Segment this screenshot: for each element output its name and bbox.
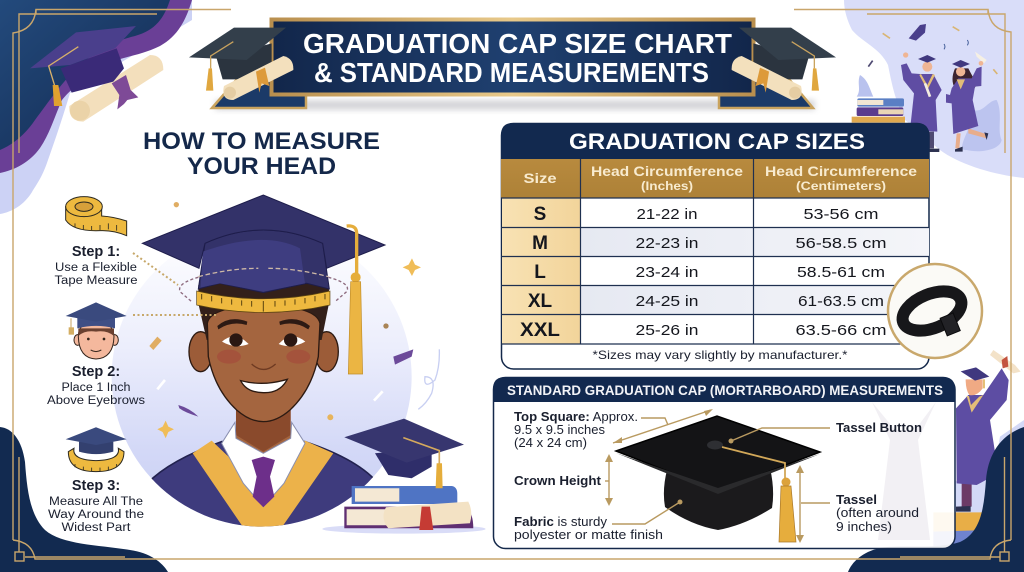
step 3: [48, 427, 144, 534]
icon: celebrating graduates: [852, 24, 1002, 152]
table rows: M: [532, 233, 548, 254]
heading: how to measure: YOUR HEAD: [187, 153, 336, 180]
callout: fabric: Fabric is sturdy: [514, 515, 608, 529]
step 2 text: Place 1 Inch: [62, 382, 130, 394]
gown: [152, 440, 374, 527]
banner plate: [272, 20, 754, 94]
brows: [217, 319, 310, 329]
callout: top square: Top Square: Approx.: [514, 410, 638, 424]
callout: tassel: (often around: [836, 506, 919, 520]
table header row: (Centimeters): [796, 179, 886, 193]
confetti: [149, 202, 439, 438]
banner title: GRADUATION CAP SIZE CHART: [303, 28, 732, 59]
heading: how to measure: [143, 128, 380, 180]
table header row: Head Circumference: [591, 164, 744, 179]
table rows: 63.5-66 cm: [796, 322, 886, 339]
cap crown: [198, 230, 329, 293]
panel header bar: [493, 377, 955, 402]
table rows: 23-24 in: [636, 264, 698, 281]
eyes: [222, 336, 249, 346]
table rows: XL: [528, 291, 553, 312]
callout: top square: 9.5 x 9.5 inches: [514, 423, 605, 437]
table rows: 53-56 cm: [804, 206, 878, 223]
table rows: 24-25 in: [636, 293, 698, 310]
callout: top square: (24 x 24 cm): [514, 436, 587, 450]
icon: small cap and books: [322, 419, 486, 534]
table rows: 56-58.5 cm: [796, 235, 886, 252]
table rows: 21-22 in: [636, 206, 698, 223]
step 1 text: [54, 244, 138, 287]
table rows: L: [534, 262, 546, 283]
table rows: 22-23 in: [636, 235, 698, 252]
measuring tape band: [197, 291, 330, 312]
faded background graduate: [872, 402, 936, 540]
arrow heads and dots: [605, 409, 804, 543]
step 1 text: Step 1:: [72, 244, 120, 260]
step 2 text: [47, 364, 145, 407]
panel title: STANDARD GRADUATION CAP (MORTARBOARD) MEASUREMENTS: [507, 383, 943, 398]
portrait illustration: [112, 195, 439, 533]
callout: fabric: polyester or matte finish: [514, 528, 663, 542]
step 3 text: Step 3:: [72, 478, 120, 494]
step 2: [47, 302, 145, 407]
step 1: [54, 197, 138, 287]
cap board: [142, 195, 385, 268]
tassel: [347, 226, 363, 374]
panel: mortarboard measurements: [493, 377, 955, 548]
lavender circle: [112, 227, 412, 527]
banner title: & STANDARD MEASUREMENTS: [314, 57, 709, 88]
callout: tassel: 9 inches): [836, 520, 892, 534]
table rows: 58.5-61 cm: [797, 264, 885, 281]
step 1 text: Use a Flexible: [55, 262, 137, 274]
step 3 text: Way Around the: [48, 509, 144, 521]
table rows: XXL: [520, 320, 560, 341]
icon: boy with cap: [66, 302, 127, 359]
dashed measure arrows: [180, 268, 348, 302]
icon: banner cap and scroll right: [732, 28, 836, 100]
neck and shirt: [236, 400, 291, 457]
tie: [252, 457, 275, 507]
callout: tassel button: Tassel Button: [836, 421, 922, 435]
heading: how to measure: HOW TO MEASURE: [143, 128, 380, 155]
table rows: S: [534, 204, 546, 225]
icon: tape roll: [66, 197, 127, 236]
callout: top square: [514, 410, 638, 450]
icon: purple cap and scroll top left: [30, 26, 163, 122]
mortarboard cap: [616, 416, 820, 542]
icon: adjustable strap inset: [888, 264, 982, 358]
dotted pointer lines: [133, 253, 218, 315]
step 3 text: Widest Part: [62, 522, 131, 534]
table header row: [501, 159, 929, 198]
step 2 text: Above Eyebrows: [47, 395, 145, 407]
banner: [212, 20, 815, 110]
cheeks: [217, 350, 241, 364]
bottom right graduate: [933, 350, 1024, 550]
smile: [241, 379, 287, 393]
banner title: [303, 28, 732, 88]
callout: tassel: [836, 493, 919, 534]
table footnote: *Sizes may vary slightly by manufacturer.*: [592, 348, 848, 362]
leader lines: [605, 410, 830, 541]
icon: banner cap and scroll left: [189, 28, 293, 100]
hair back: [198, 283, 329, 340]
step 1 text: Tape Measure: [54, 275, 138, 287]
table rows: 61-63.5 cm: [798, 293, 884, 310]
banner left ribbon fold: [212, 78, 306, 108]
bottom-left navy corner: [0, 427, 168, 572]
icon: cap with tape ring: [66, 427, 127, 472]
top-left corner waves: [0, 0, 192, 214]
ears: [189, 332, 212, 372]
face: [207, 305, 320, 422]
table title: GRADUATION CAP SIZES: [569, 129, 865, 154]
callout: fabric: [514, 515, 663, 542]
step 3 text: [48, 478, 144, 534]
table rows: [501, 159, 929, 344]
bottom-right navy corner: [848, 427, 1024, 572]
table rows: 25-26 in: [636, 322, 698, 339]
callout: crown height: Crown Height: [514, 474, 602, 488]
table header row: (Inches): [641, 179, 693, 193]
banner right ribbon fold: [719, 78, 813, 108]
table title bar: [501, 123, 929, 159]
banner shadow: [215, 100, 815, 110]
step 3 text: Measure All The: [49, 496, 143, 508]
tassel: [722, 447, 785, 480]
table header row: Head Circumference: [765, 164, 918, 179]
callout: tassel: Tassel: [836, 493, 877, 507]
table header row: Size: [524, 171, 557, 186]
step 2 text: Step 2:: [72, 364, 120, 380]
panel: size table: [501, 123, 929, 369]
nose: [252, 364, 276, 369]
top-right lavender blob: [844, 0, 1024, 178]
